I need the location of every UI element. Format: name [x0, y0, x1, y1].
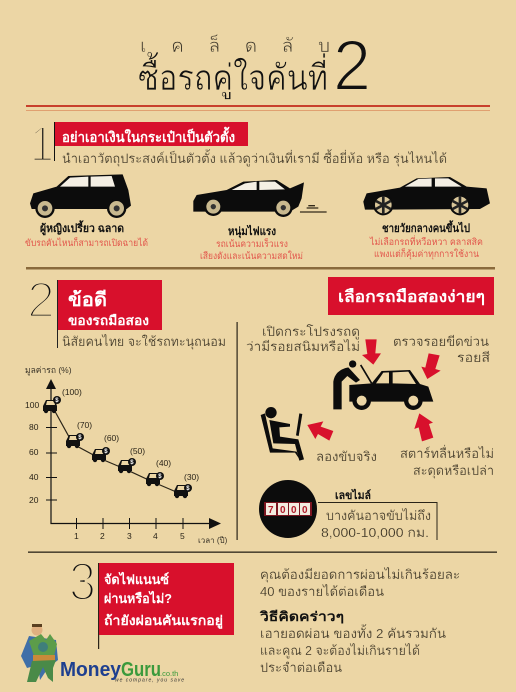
section 3 text: คุณต้องมียอดการผ่อนไม่เกินร้อยละ: [260, 567, 460, 583]
title: เ ค ล็ ด ลั บ: [140, 33, 330, 57]
tip: scratches: [393, 334, 490, 365]
tip: open hood: เปิดกระโปรงรถดู: [262, 324, 360, 340]
caption: young man: [200, 224, 303, 262]
icon: odometer: 7: [268, 505, 274, 516]
car markers: $: [158, 474, 162, 480]
section 1 text: นำเอาวัตถุประสงค์เป็นตัวตั้ง แล้วดูว่าเงินที่เรามี ซื้อยี่ห้อ หรือ รุ่นไหนได้: [62, 149, 447, 167]
line chart: car value over time: 5: [180, 531, 185, 541]
logo: MoneyGuru: .co.th: [160, 669, 178, 678]
line chart: car value over time: (60): [104, 433, 119, 443]
section 2 text: นิสัยคนไทย จะใช้รถทะนุถนอม: [62, 334, 226, 350]
icon: odometer: [259, 480, 317, 538]
heading: choose used car: [328, 277, 494, 315]
mileage note: เลขไมล์: [335, 488, 371, 502]
section 2 heading: ข้อดี: [68, 289, 107, 311]
caption: young man: หนุ่มไฟแรง: [228, 224, 276, 239]
line chart: car value over time: มูลค่ารถ (%): [25, 365, 72, 376]
tip: open hood: [246, 324, 360, 354]
caption: middle aged man: แพงแต่ก็คุ้มค่าทุกการใช้งาน: [374, 247, 479, 260]
section 1 heading: 1: [30, 116, 54, 172]
icon: odometer: 0: [280, 505, 286, 516]
section 3 text: [259, 567, 460, 675]
logo: MoneyGuru: we compare, you save: [115, 678, 184, 684]
tip: scratches: ตรวจรอยขีดข่วน: [393, 334, 489, 349]
caption: woman: [25, 220, 148, 249]
mileage note: [318, 488, 437, 540]
title: [138, 27, 371, 106]
logo: MoneyGuru: Money: [60, 659, 122, 681]
line chart: car value over time: 1: [74, 531, 79, 541]
section 3 text: ประจำต่อเดือน: [260, 660, 342, 675]
caption: woman: ผู้หญิงเปรี้ยว ฉลาด: [40, 220, 124, 236]
caption: middle aged man: ชายวัยกลางคนขึ้นไป: [382, 220, 470, 235]
line chart: car value over time: 4: [153, 531, 158, 541]
logo: MoneyGuru: Guru: [121, 659, 161, 681]
icon: superhero mascot: [21, 624, 58, 682]
car: sports sedan: [193, 180, 327, 217]
tip: open hood: ว่ามีรอยสนิมหรือไม่: [246, 339, 360, 354]
mileage note: 8,000-10,000 กม.: [321, 525, 429, 540]
line chart: car value over time: 40: [29, 472, 39, 482]
title: 2: [333, 27, 371, 106]
line chart: car value over time: (40): [156, 458, 171, 468]
line chart: car value over time: (70): [77, 420, 92, 430]
line chart: car value over time: เวลา (ปี): [198, 536, 228, 545]
icon: odometer: 0: [302, 505, 308, 516]
car markers: $: [186, 486, 190, 492]
section 1 heading: อย่าเอาเงินในกระเป๋าเป็นตัวตั้ง: [62, 126, 235, 145]
caption: young man: เสียงดังและเน้นความสดใหม่: [200, 250, 303, 262]
section 3 text: เอายอดผ่อน ของทั้ง 2 คันรวมกัน: [260, 624, 446, 641]
line chart: car value over time: 100: [25, 400, 39, 410]
caption: middle aged man: [369, 220, 483, 260]
tip: smell: สตาร์ทลื่นหรือไม่: [400, 445, 494, 461]
tip: smell: สะดุดหรือเปล่า: [413, 463, 494, 479]
car markers: $: [78, 435, 82, 441]
line chart: car value over time: [25, 365, 228, 545]
section 2 heading: 2: [27, 272, 55, 328]
mileage note: บางคันอาจขับไม่ถึง: [326, 508, 431, 523]
icon: driver: [261, 407, 304, 461]
icon: odometer: 0: [291, 505, 297, 516]
car: luxury sedan: [363, 177, 490, 215]
section 1 heading: [30, 116, 248, 172]
car markers: $: [104, 449, 108, 455]
heading: choose used car: เลือกรถมือสองง่ายๆ: [338, 288, 485, 306]
caption: woman: ขับรถคันไหนก็สามารถเปิดฉายได้: [25, 236, 148, 249]
line chart: car value over time: (30): [184, 472, 199, 482]
car markers: $: [130, 460, 134, 466]
caption: young man: รถเน้นความเร็วแรง: [216, 237, 288, 250]
line chart: car value over time: 3: [127, 531, 132, 541]
section 2 heading: ของรถมือสอง: [68, 313, 149, 328]
line chart: car value over time: (50): [130, 446, 145, 456]
line chart: car value over time: 2: [100, 531, 105, 541]
section 3 heading: 3: [69, 552, 96, 612]
section 3 heading: ผ่านหรือไม่?: [104, 590, 172, 606]
section 3 heading: [69, 552, 234, 649]
logo: MoneyGuru: [60, 659, 184, 684]
arrows: red pointers: [307, 339, 441, 441]
section 3 text: และคูณ 2 จะต้องไม่เกินรายได้: [260, 643, 420, 659]
car: hatchback: [30, 174, 131, 218]
section 3 heading: ถ้ายังผ่อนคันแรกอยู่: [104, 613, 223, 629]
tip: smell: [400, 445, 494, 479]
title: ซื้อรถคู่ใจคันที่: [138, 51, 328, 100]
caption: middle aged man: ไม่เลือกรถที่หวือหวา คลาสสิค: [369, 235, 483, 248]
section 3 text: วิธีคิดคร่าวๆ: [259, 609, 344, 624]
section 2 heading: [27, 272, 162, 348]
icon: mechanic and car: [333, 360, 433, 410]
tip: test drive: ลองขับจริง: [316, 449, 377, 464]
line chart: car value over time: 20: [29, 495, 39, 505]
line chart: car value over time: 80: [29, 422, 39, 432]
section 3 text: 40 ของรายได้ต่อเดือน: [260, 584, 384, 599]
section 3 heading: จัดไฟแนนซ์: [104, 571, 169, 587]
tip: scratches: รอยสี: [457, 350, 490, 365]
line chart: car value over time: 60: [29, 447, 39, 457]
line chart: car value over time: (100): [62, 387, 82, 397]
car markers: [43, 396, 192, 498]
car markers: $: [55, 398, 59, 404]
